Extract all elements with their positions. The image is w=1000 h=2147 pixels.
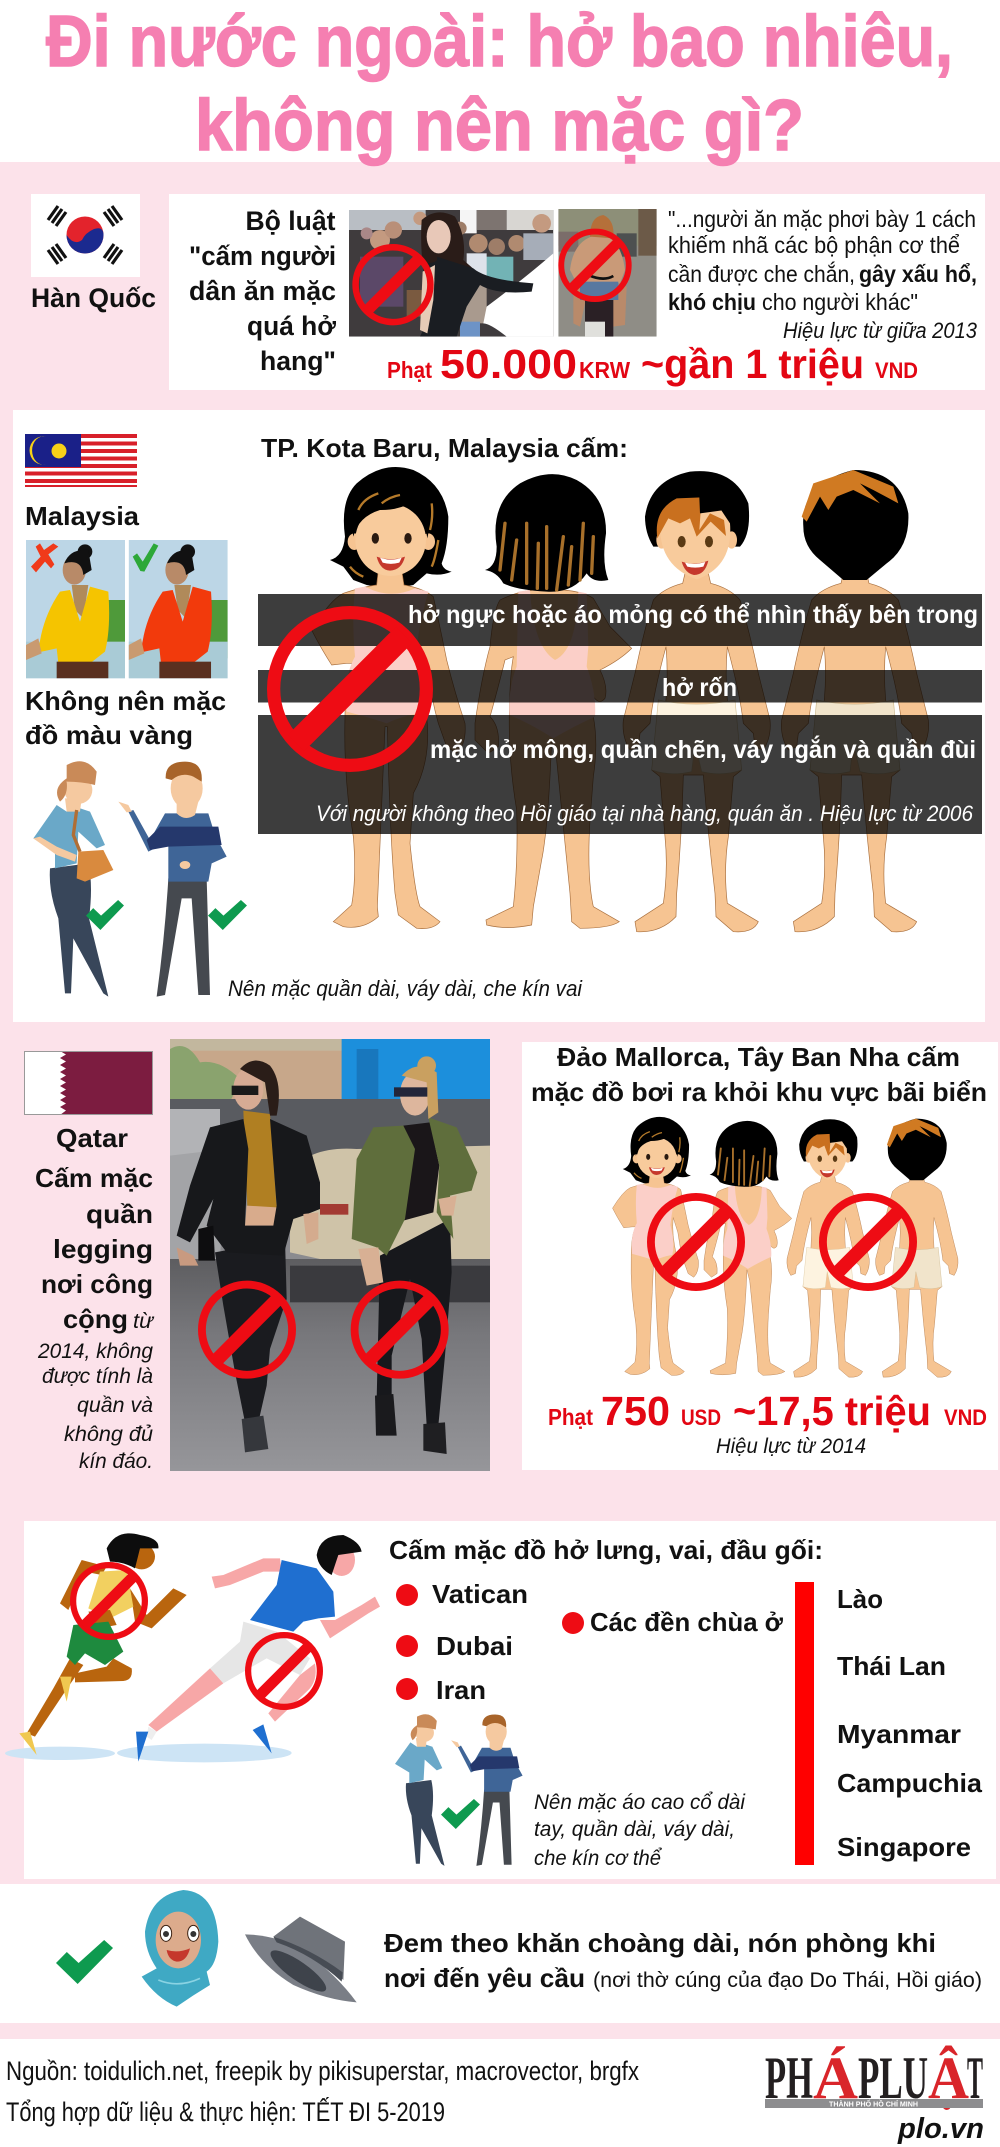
photo: woman on motorbike with prohibition sign bbox=[558, 209, 657, 337]
logo: Phap Luat: Á bbox=[813, 2045, 858, 2111]
text: avoid yellow: đồ màu vàng bbox=[25, 720, 193, 750]
heading: Mallorca rule bbox=[531, 1042, 987, 1107]
text: Qatar rule: quần và bbox=[77, 1394, 153, 1417]
logo: Phap Luat: Ậ bbox=[928, 2045, 969, 2111]
text: banner labels: mặc hở mông, quần chẽn, váy ngắn và quần đùi bbox=[430, 734, 976, 764]
text: law name: quá hở bbox=[247, 311, 337, 341]
text: avoid yellow bbox=[25, 686, 226, 750]
text: law name: dân ăn mặc bbox=[189, 276, 336, 306]
text: Qatar rule: Cấm mặc bbox=[35, 1163, 153, 1193]
text: banner labels bbox=[316, 601, 978, 826]
text: fine amount: ~17,5 triệu bbox=[733, 1388, 931, 1434]
text: Qatar rule: nơi công bbox=[41, 1269, 153, 1299]
text: sources and credits: Tổng hợp dữ liệu & thực hiện: TẾT ĐI 5-2019 bbox=[6, 2096, 445, 2127]
text: Qatar label: Qatar bbox=[56, 1123, 128, 1153]
icon: prohibition sign bbox=[355, 1285, 445, 1375]
text: recommendation: Nên mặc quần dài, váy dài, che kín vai bbox=[228, 976, 583, 1001]
logo: Phap Luat: PH bbox=[765, 2045, 813, 2111]
icon: prohibition sign bbox=[274, 613, 426, 765]
list: countries: Dubai bbox=[436, 1631, 513, 1661]
text: law name: hang" bbox=[260, 346, 336, 376]
icon: prohibition sign bbox=[823, 1197, 913, 1287]
banner: exposed chest or sheer tops bbox=[258, 594, 982, 646]
icon: prohibition sign bbox=[73, 1565, 145, 1637]
text: law quote bbox=[668, 206, 978, 343]
text: Qatar rule: 2014, không bbox=[37, 1340, 153, 1363]
text: effective date: Hiệu lực từ 2014 bbox=[716, 1435, 866, 1458]
text: recommendation bbox=[534, 1791, 746, 1870]
illustration: two runners with prohibition signs bbox=[5, 1533, 380, 1762]
list: Southeast Asian countries bbox=[837, 1584, 983, 1862]
title: không nên mặc gì? bbox=[195, 86, 804, 166]
text: Qatar rule: legging bbox=[53, 1234, 153, 1264]
panel: South Korea flag and label: Hàn Quốc bbox=[31, 283, 156, 313]
text: recommendation: tay, quần dài, váy dài, bbox=[534, 1818, 735, 1841]
text: sources and credits: Nguồn: toidulich.net, freepik by pikisuperstar, macrovector, brgfx bbox=[6, 2056, 639, 2086]
logo: Phap Luat bbox=[765, 2045, 984, 2145]
text: Malaysia label: Malaysia bbox=[25, 501, 140, 531]
text: Qatar rule: được tính là bbox=[42, 1365, 153, 1388]
text: fine amount: ~gần 1 triệu bbox=[641, 341, 864, 387]
icon: prohibition sign bbox=[561, 232, 629, 299]
text: Qatar rule: không đủ bbox=[64, 1423, 153, 1446]
photo: yellow blouse (not allowed) bbox=[26, 540, 125, 678]
text: Qatar rule: quần bbox=[86, 1199, 153, 1229]
icon: prohibition sign bbox=[248, 1635, 320, 1707]
list: Southeast Asian countries: Myanmar bbox=[837, 1719, 961, 1749]
text: law quote: khiếm nhã các bộ phận cơ thể bbox=[668, 232, 960, 258]
text: banner labels: Với người không theo Hồi giáo tại nhà hàng, quán ăn . Hiệu lực từ 2006 bbox=[316, 801, 974, 826]
heading: Mallorca rule: Đảo Mallorca, Tây Ban Nha cấm bbox=[557, 1042, 960, 1072]
text: temples in: Các đền chùa ở bbox=[590, 1607, 784, 1637]
text: Qatar rule: cộng bbox=[63, 1304, 128, 1334]
text: law name: "cấm người bbox=[189, 241, 336, 271]
icon: prohibition sign bbox=[651, 1197, 741, 1287]
logo: Phap Luat: PLU bbox=[858, 2045, 928, 2111]
list: countries: Iran bbox=[436, 1675, 486, 1705]
photo: woman in a crowd with prohibition sign bbox=[349, 210, 553, 337]
banner: exposed buttocks, tight pants, miniskirts, shorts bbox=[258, 715, 982, 834]
list: Southeast Asian countries: Singapore bbox=[837, 1832, 971, 1862]
icon: green check bbox=[56, 1940, 113, 1984]
red divider bar bbox=[795, 1582, 814, 1865]
text: fine amount: VND bbox=[875, 358, 918, 383]
panel: Mallorca, Spain bbox=[522, 1042, 998, 1470]
heading: Kota Baru: TP. Kota Baru, Malaysia cấm: bbox=[261, 433, 628, 463]
text: banner labels: hở rốn bbox=[662, 674, 737, 702]
heading: banned clothing: Cấm mặc đồ hở lưng, vai, đầu gối: bbox=[389, 1535, 823, 1565]
text: recommendation: Nên mặc áo cao cổ dài bbox=[534, 1791, 746, 1814]
icon: Malaysia flag bbox=[25, 434, 137, 487]
icon: Qatar flag bbox=[24, 1051, 153, 1115]
text: bring a long scarf and hat: Đem theo khăn choàng dài, nón phòng khi bbox=[384, 1928, 936, 1958]
list: Southeast Asian countries: Campuchia bbox=[837, 1768, 983, 1798]
photo: two women in leggings with prohibition signs bbox=[170, 1039, 490, 1471]
text: banner labels: hở ngực hoặc áo mỏng có thể nhìn thấy bên trong bbox=[408, 601, 978, 629]
icon: South Korea flag bbox=[48, 206, 122, 264]
illustration: recommended outfits couple small bbox=[395, 1714, 523, 1866]
panel: Qatar bbox=[24, 1039, 490, 1473]
illustration: recommended outfits couple bbox=[33, 761, 227, 997]
panel: covering back, shoulders and knees bbox=[5, 1521, 996, 1879]
text: fine amount: Phạt bbox=[548, 1404, 593, 1430]
text: recommendation: che kín cơ thể bbox=[534, 1847, 662, 1870]
text: fine amount: VND bbox=[944, 1405, 987, 1430]
text: law quote: "...người ăn mặc phơi bày 1 cách bbox=[668, 206, 976, 232]
icon: grey hat bbox=[245, 1917, 357, 2002]
text: fine amount: 750 bbox=[601, 1388, 670, 1434]
list: Southeast Asian countries: Thái Lan bbox=[837, 1651, 946, 1681]
icon: green check bbox=[208, 900, 247, 930]
icon: green check bbox=[133, 543, 158, 572]
text: law name bbox=[189, 206, 337, 376]
panel: Malaysia bbox=[13, 410, 985, 1022]
text: law quote: cần được che chắn, bbox=[668, 261, 855, 287]
heading: Mallorca rule: mặc đồ bơi ra khỏi khu vực bãi biển bbox=[531, 1077, 987, 1107]
text: Qatar rule: kín đáo. bbox=[79, 1450, 153, 1473]
text: law quote: gây xấu hổ, bbox=[859, 261, 977, 287]
text: Qatar rule: từ bbox=[133, 1310, 155, 1333]
text: sources and credits bbox=[6, 2056, 639, 2127]
photo: red blouse (allowed) bbox=[129, 540, 228, 678]
icon: prohibition sign bbox=[356, 247, 430, 322]
text: bring a long scarf and hat: (nơi thờ cúng của đạo Do Thái, Hồi giáo) bbox=[593, 1969, 982, 1992]
text: law quote: cho người khác" bbox=[762, 289, 918, 315]
logo: Phap Luat: plo.vn bbox=[897, 2113, 984, 2145]
panel: South Korea flag and label bbox=[31, 194, 156, 313]
text: bring a long scarf and hat: nơi đến yêu cầu bbox=[384, 1963, 585, 1993]
icon: prohibition sign bbox=[202, 1285, 292, 1375]
text: fine amount: KRW bbox=[579, 357, 630, 383]
icon: green check bbox=[86, 900, 124, 930]
text: bring a long scarf and hat bbox=[384, 1928, 982, 1993]
text: fine amount: 50.000 bbox=[440, 341, 577, 387]
list: Southeast Asian countries: Lào bbox=[837, 1584, 883, 1614]
text: law name: Bộ luật bbox=[246, 206, 336, 236]
text: law quote: Hiệu lực từ giữa 2013 bbox=[783, 318, 978, 343]
icon: woman in hijab bbox=[142, 1890, 218, 2007]
text: Qatar rule bbox=[35, 1163, 155, 1473]
text: avoid yellow: Không nên mặc bbox=[25, 686, 226, 716]
text: fine amount: USD bbox=[681, 1405, 721, 1430]
text: fine amount bbox=[548, 1388, 987, 1434]
logo: Phap Luat: THÀNH PHỐ HỒ CHÍ MINH bbox=[829, 2098, 918, 2108]
illustration: four children bbox=[312, 467, 929, 932]
list: countries: Vatican bbox=[432, 1579, 528, 1609]
panel: bring a scarf and hat bbox=[56, 1890, 982, 2007]
illustration: four children in swimwear bbox=[613, 1117, 958, 1377]
text: fine amount bbox=[387, 341, 918, 387]
text: law quote: khó chịu bbox=[668, 289, 756, 315]
banner: exposed navel bbox=[258, 670, 982, 702]
icon: red X bbox=[31, 543, 58, 572]
title bbox=[46, 2, 953, 166]
text: fine amount: Phạt bbox=[387, 357, 432, 383]
icon: green check bbox=[441, 1799, 480, 1829]
panel: South Korea law bbox=[169, 194, 985, 390]
list: countries bbox=[396, 1579, 528, 1705]
